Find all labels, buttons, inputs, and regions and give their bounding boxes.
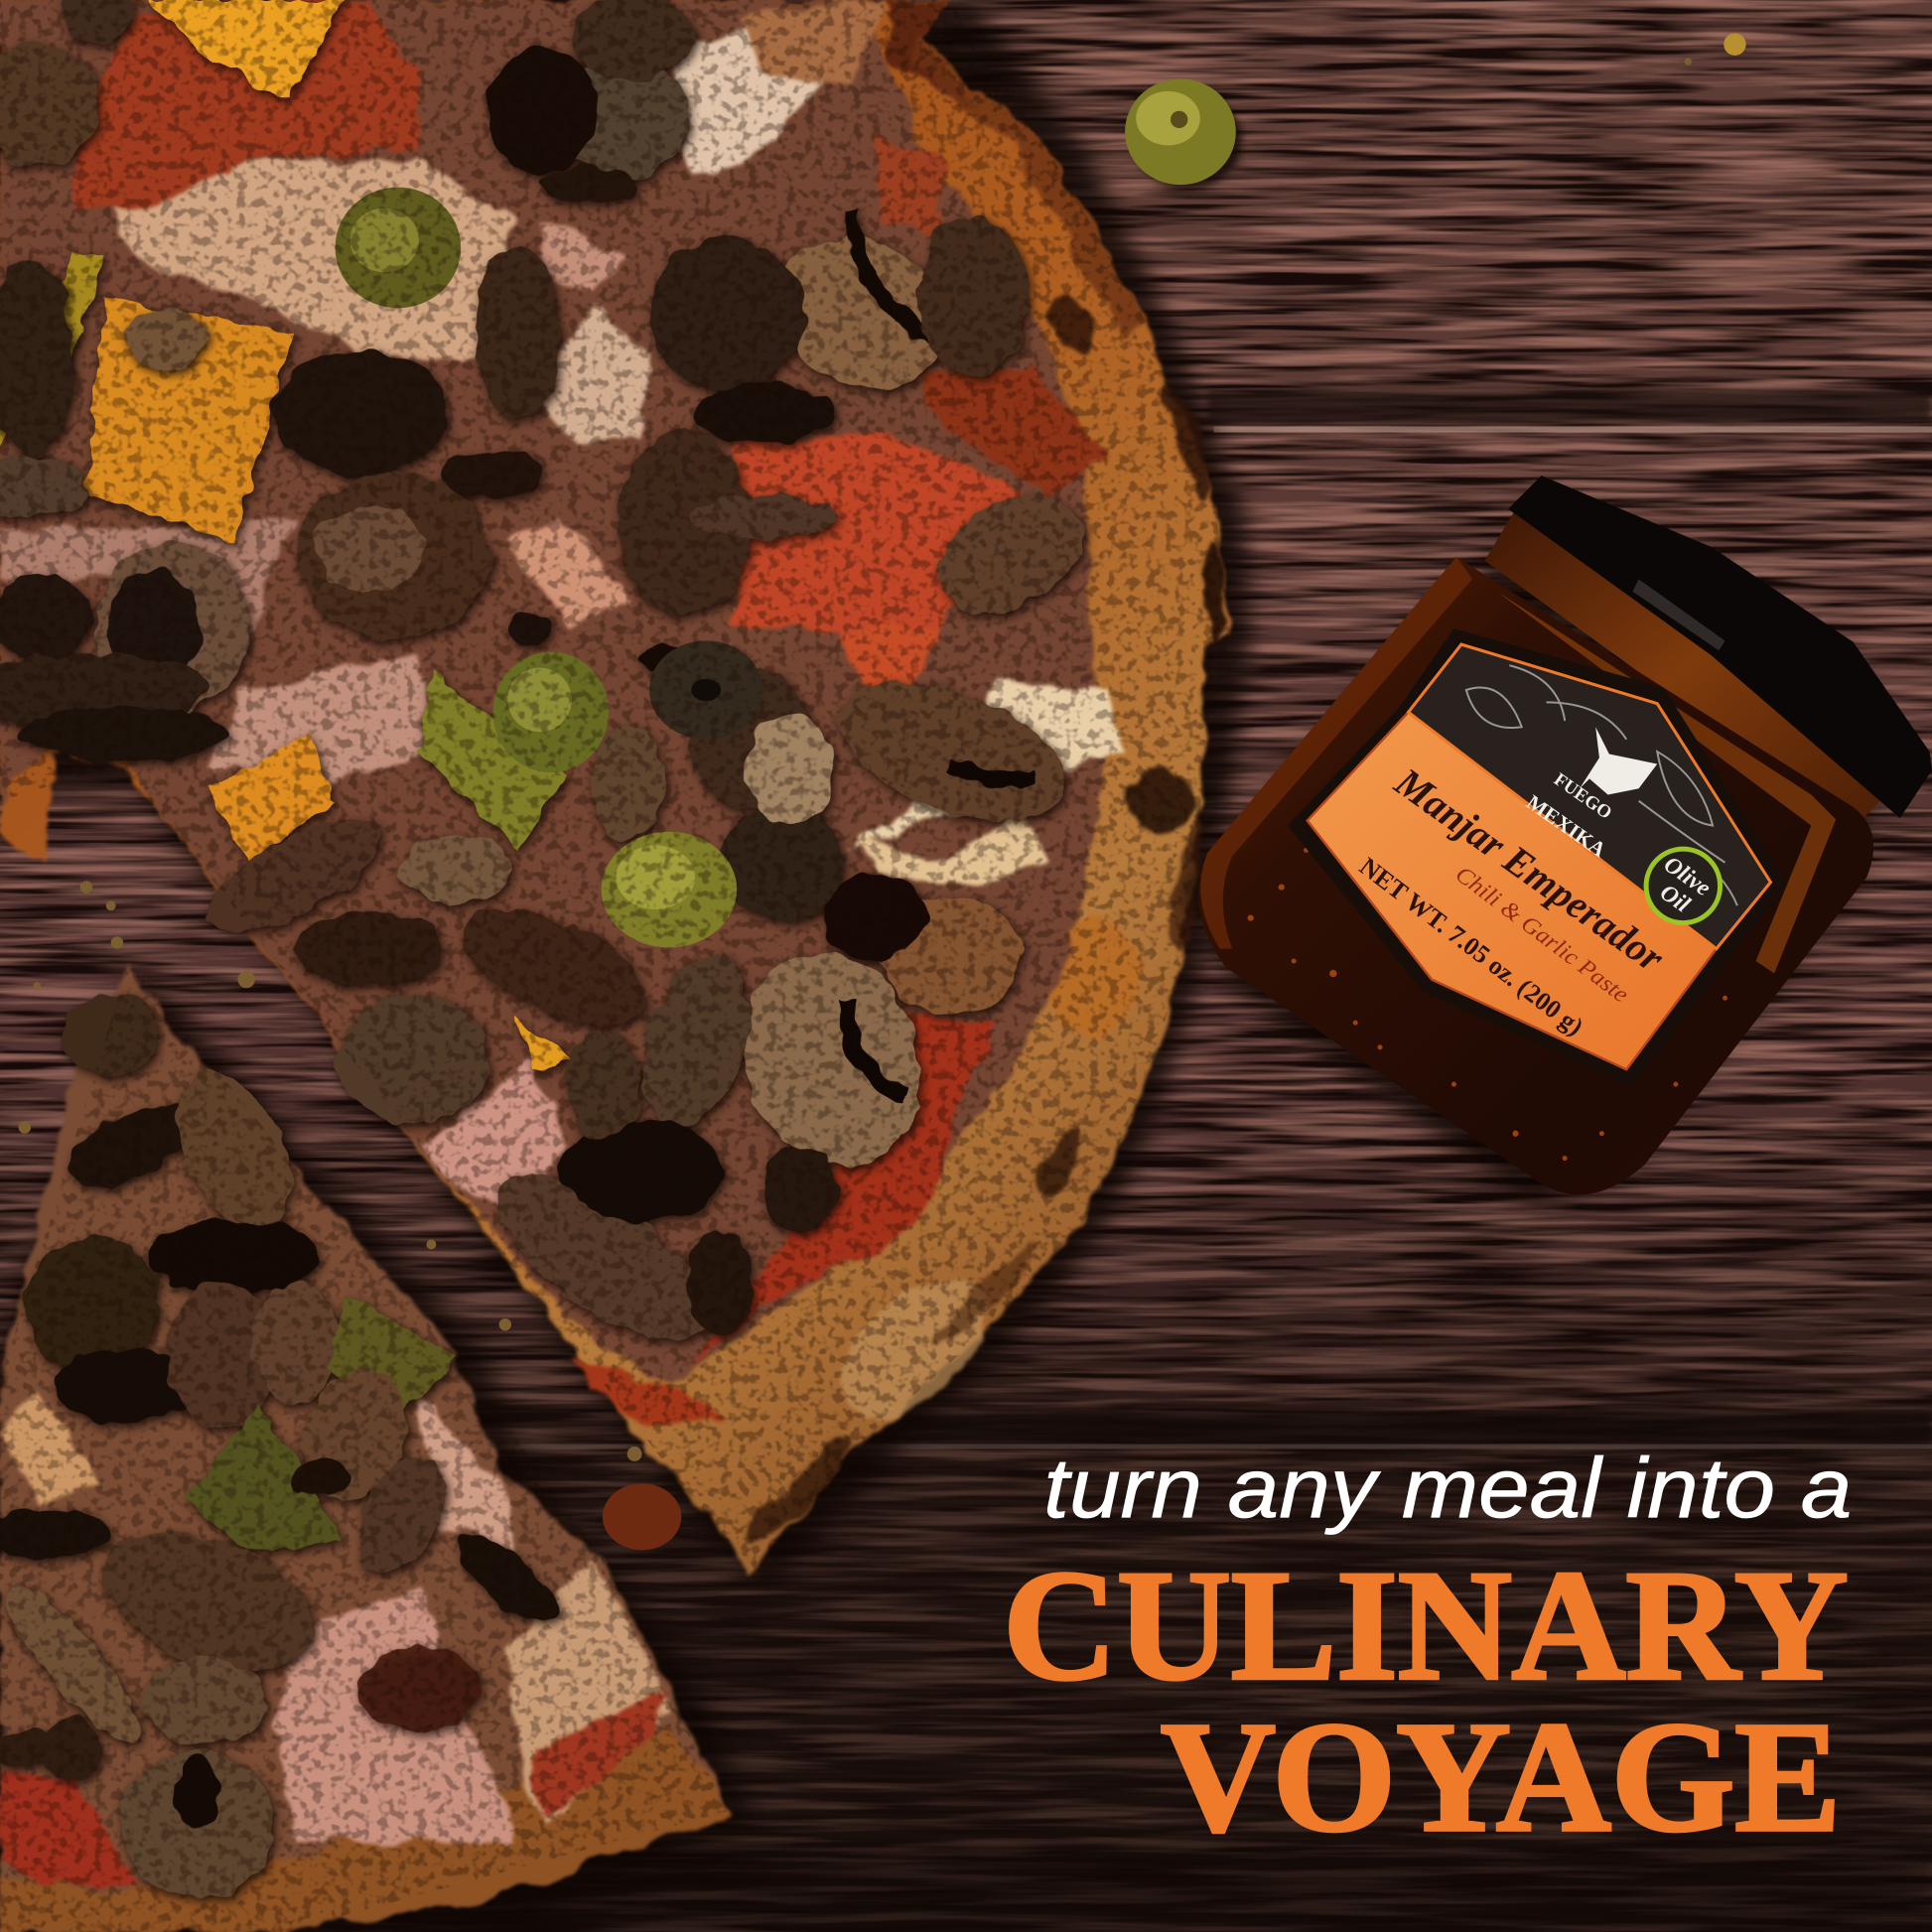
slice crust — [0, 1725, 730, 1932]
sauce and salami — [73, 0, 1109, 1430]
headline line 2: VOYAGE — [1161, 1690, 1841, 1864]
label: brand name: FUEGO — [1550, 769, 1615, 824]
cheese and ham — [0, 0, 1121, 1220]
product jar — [1182, 476, 1932, 1201]
slice toppings — [0, 993, 568, 1897]
jar contents flecks — [1248, 786, 1727, 1161]
label: orange panel — [1308, 712, 1717, 1069]
jar lid — [1508, 476, 1932, 818]
sauce drip — [603, 1483, 681, 1550]
label: olive oil badge: Olive — [1659, 852, 1716, 901]
jar neck — [1484, 499, 1891, 828]
grit texture on pizza — [0, 0, 1230, 1575]
headline — [1003, 1538, 1849, 1864]
label: olive oil badge: Oil — [1655, 880, 1695, 918]
main pizza — [0, 0, 1251, 1589]
slice base — [0, 961, 727, 1932]
scattered herbs — [19, 34, 1746, 1461]
slice grit texture — [0, 961, 727, 1932]
label: product name: Manjar Emperador — [1386, 759, 1673, 981]
label: eagle emblem — [1580, 727, 1657, 794]
jar glass body — [1198, 557, 1873, 1194]
slice cheese and sauce — [0, 1392, 671, 1885]
tagline: turn any meal into a — [1043, 1441, 1852, 1536]
jar shadow — [1182, 542, 1872, 1201]
label: descriptor: Chili & Garlic Paste — [1450, 862, 1633, 1008]
loose olive — [1125, 78, 1242, 190]
label: net weight: NET WT. 7.05 oz. (200 g) — [1354, 852, 1588, 1041]
mushrooms — [0, 0, 1102, 1370]
pizza toppings base — [0, 0, 1103, 1386]
pizza crust — [0, 0, 1230, 1575]
bell peppers — [0, 0, 573, 1072]
olives on pizza — [336, 188, 762, 947]
label: brand name — [1522, 769, 1615, 863]
headline line 1: CULINARY — [1003, 1538, 1849, 1713]
label: olive oil badge — [1646, 849, 1721, 923]
crust char marks — [738, 0, 1225, 1555]
pizza slice — [0, 961, 758, 1932]
slice shadow — [0, 967, 758, 1932]
label: chili illustration panel — [1409, 644, 1770, 949]
pizza shadow — [0, 0, 1251, 1589]
label: brand name: MEXIKA — [1522, 790, 1611, 863]
label backing — [1288, 628, 1787, 1087]
